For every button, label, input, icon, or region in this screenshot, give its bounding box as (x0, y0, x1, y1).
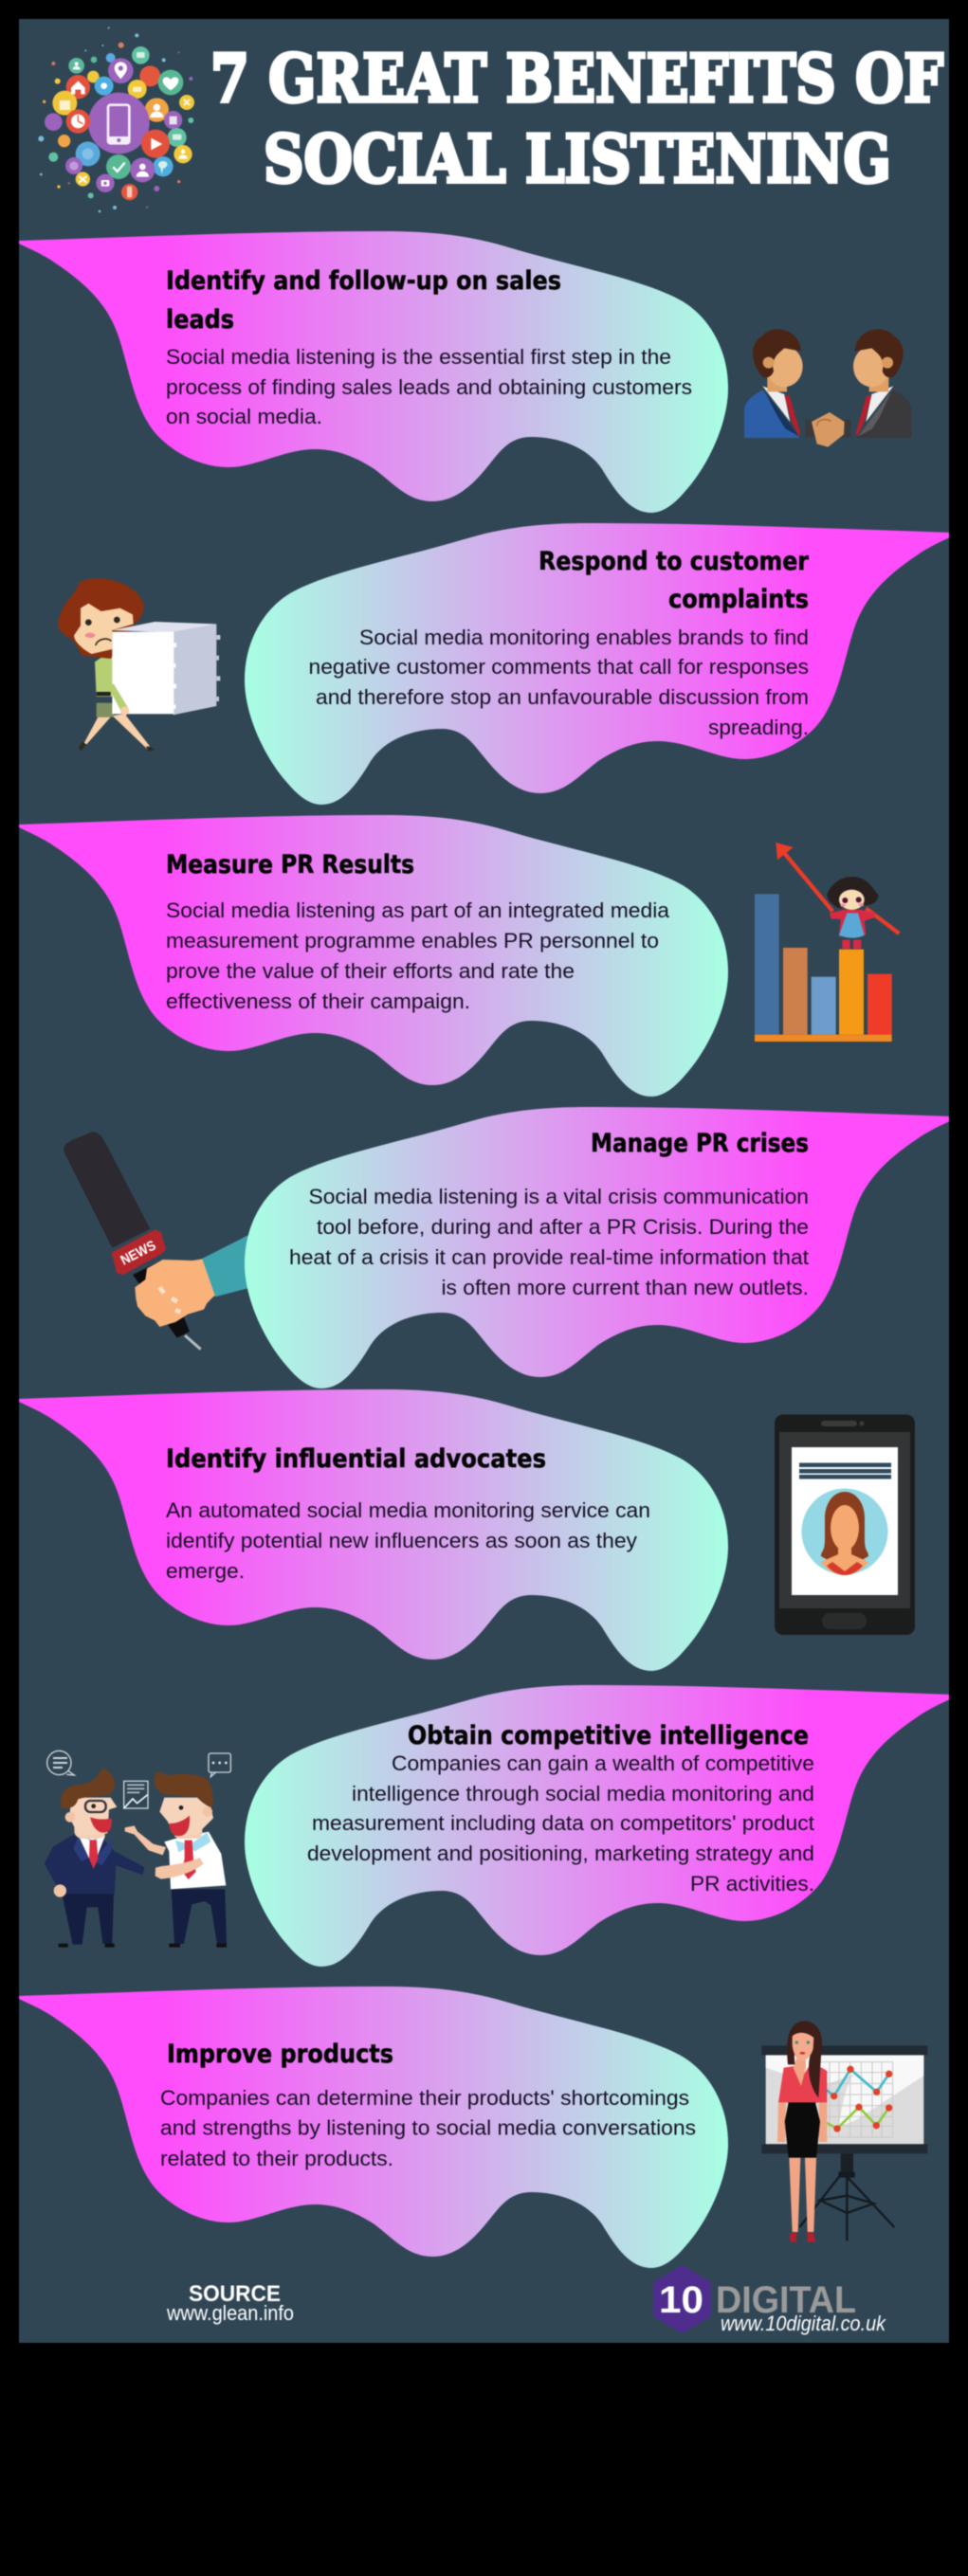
body text: development and positioning, marketing strategy and (307, 1841, 814, 1865)
body text: Social media monitoring enables brands to find (359, 626, 809, 649)
blob (19, 1389, 728, 1671)
body text: heat of a crisis it can provide real-time information that (289, 1245, 810, 1269)
body text: Companies can gain a wealth of competitive (392, 1751, 814, 1775)
logo number: 10 (659, 2279, 703, 2321)
body text: Social media listening is the essential first step in the (166, 345, 671, 369)
body text: effectiveness of their campaign. (166, 989, 470, 1013)
blob (245, 523, 954, 805)
body text: measurement including data on competitors' product (312, 1811, 815, 1835)
heading: Identify and follow-up on sales (166, 266, 561, 296)
source credit (166, 2281, 294, 2325)
body text: identify potential new influencers as soon as they (166, 1529, 638, 1552)
panel: obtain competitive intelligence (245, 1685, 954, 1967)
icon: woman presenting chart (761, 2021, 927, 2242)
body text: Social media listening is a vital crisis communication (309, 1185, 809, 1208)
source heading: SOURCE (189, 2281, 281, 2307)
body text: and therefore stop an unfavourable discussion from (316, 685, 809, 709)
panel: identify and follow-up on sales leads (19, 231, 728, 513)
panel: improve products (19, 1986, 728, 2268)
logo: 10 Digital (653, 2265, 886, 2335)
body text: Social media listening as part of an integrated media (166, 898, 669, 922)
body text: intelligence through social media monitoring and (352, 1782, 814, 1805)
heading: complaints (668, 585, 809, 614)
body text: An automated social media monitoring service can (166, 1498, 650, 1522)
icon: social media cluster (38, 27, 194, 212)
label: NEWS: NEWS (119, 1238, 158, 1269)
body text: measurement programme enables PR personnel to (166, 929, 659, 952)
panel: identify influential advocates (19, 1389, 728, 1671)
body text: Companies can determine their products' shortcomings (160, 2086, 689, 2110)
panel: respond to customer complaints (245, 523, 954, 805)
body text: negative customer comments that call for responses (309, 655, 809, 679)
logo url: www.10digital.co.uk (721, 2312, 886, 2335)
blob (19, 815, 728, 1097)
body text: on social media. (166, 405, 322, 428)
body text: emerge. (166, 1559, 245, 1583)
heading: Manage PR crises (591, 1129, 809, 1158)
panel: measure PR results (19, 815, 728, 1097)
body text: prove the value of their efforts and rate the (166, 959, 575, 983)
body text: process of finding sales leads and obtaining customers (166, 375, 692, 399)
heading: Measure PR Results (166, 850, 414, 880)
body text: tool before, during and after a PR Crisis. During the (317, 1215, 809, 1239)
icon: hand holding news microphone (64, 1132, 251, 1350)
icon: smartphone with profile (775, 1414, 915, 1635)
heading: Identify influential advocates (166, 1444, 546, 1474)
title (210, 41, 943, 198)
heading: Improve products (167, 2040, 393, 2069)
blob (19, 1986, 728, 2268)
body text: related to their products. (160, 2147, 393, 2170)
body text: is often more current than new outlets. (442, 1276, 809, 1299)
blob (19, 231, 728, 513)
blob (245, 1685, 954, 1967)
icon: businessmen handshake (744, 329, 912, 447)
body text: PR activities. (690, 1872, 814, 1896)
panel: manage PR crises (64, 1107, 954, 1388)
icon: two businessmen talking (45, 1751, 230, 1948)
heading: leads (166, 305, 234, 335)
icon: woman carrying papers (58, 578, 220, 752)
source url: www.glean.info (166, 2301, 294, 2325)
body text: and strengths by listening to social media conversations (160, 2115, 696, 2140)
logo word: DIGITAL (716, 2279, 856, 2321)
heading: Respond to customer (539, 547, 810, 576)
hexagon badge (653, 2265, 711, 2333)
heading: Obtain competitive intelligence (408, 1721, 809, 1751)
body text: spreading. (708, 716, 809, 739)
blob (245, 1107, 954, 1388)
bar chart with girl and rising arrow (755, 843, 899, 1042)
